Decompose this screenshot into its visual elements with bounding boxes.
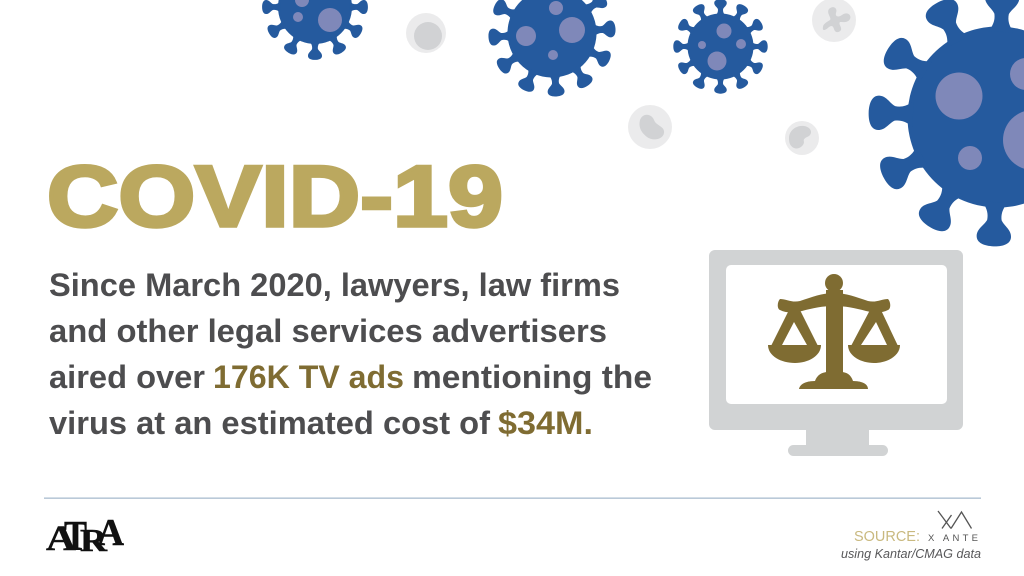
logo: ATRA — [46, 512, 125, 560]
icon: grey cell 3 — [785, 121, 819, 155]
icon: virus top centre — [484, 0, 620, 101]
icon: virus top left — [262, 0, 368, 60]
logo: X ANTE mark — [938, 511, 972, 528]
text block: description — [49, 267, 652, 441]
icon: grey cell 1 — [406, 13, 446, 53]
text block: description: mentioning the — [412, 359, 652, 395]
source note: using Kantar/CMAG data — [841, 547, 981, 561]
source name: X ANTE — [928, 533, 978, 544]
text block: description: 176K TV ads — [213, 359, 404, 395]
logo: ATRA: A — [97, 512, 125, 554]
text block: description: aired over — [49, 359, 205, 395]
text block: description: and other legal services advertisers — [49, 313, 607, 349]
logo: ATRA: T — [64, 514, 87, 560]
icon: scales of justice — [768, 274, 900, 389]
icon: grey cell 2 — [628, 105, 672, 149]
logo: ATRA: A — [46, 518, 76, 558]
text block: description: Since March 2020, lawyers, law firms — [49, 267, 620, 303]
icon: computer monitor with scales of justice — [709, 250, 963, 456]
icon: large virus right — [864, 0, 1024, 251]
footer divider — [44, 498, 981, 499]
text block: description: virus at an estimated cost of — [49, 405, 490, 441]
icon: small virus — [673, 0, 768, 94]
text block: description: $34M. — [498, 405, 593, 441]
icon: grey cell 4 — [812, 0, 856, 42]
source label: SOURCE: — [854, 529, 920, 545]
logo: ATRA: R — [80, 522, 108, 558]
title: COVID-19 — [47, 149, 503, 245]
